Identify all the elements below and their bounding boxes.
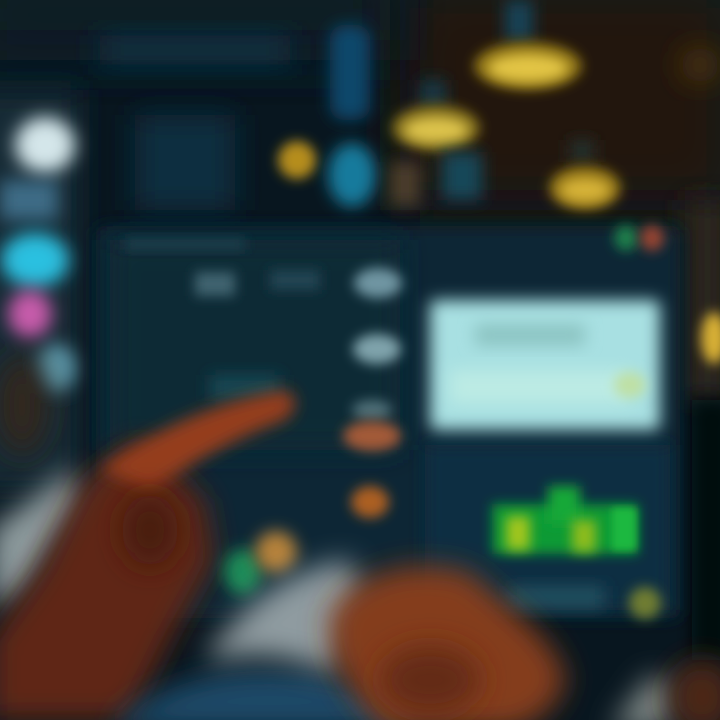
pale blue panel	[0, 180, 58, 220]
palm	[0, 440, 215, 720]
hanging lamps and warm lights	[278, 0, 720, 364]
white glow	[15, 117, 75, 173]
jeans	[115, 671, 415, 720]
small green and orange token	[224, 531, 297, 595]
light blue glow	[36, 344, 76, 392]
hand	[330, 566, 566, 720]
menu items	[343, 268, 402, 518]
right hand and cuff	[210, 560, 566, 720]
left side glowing icons	[0, 117, 76, 455]
bottom right sleeve and arm	[610, 659, 720, 720]
cuff	[210, 560, 365, 675]
lamp 3	[549, 140, 621, 210]
left hand with pointing finger	[0, 390, 295, 720]
panel: dashboard	[96, 225, 680, 619]
small amber light	[278, 141, 316, 179]
faint text rows	[125, 238, 320, 401]
sleeve	[0, 470, 85, 610]
green bar chart	[492, 486, 638, 554]
blue bottles	[328, 25, 482, 207]
light screen	[430, 300, 660, 430]
pink glow	[8, 290, 52, 338]
footer row	[508, 586, 661, 619]
finger	[100, 390, 295, 490]
cyan glow	[1, 233, 69, 287]
right edge light	[701, 312, 720, 364]
muted brown patch	[0, 355, 48, 455]
lamp 1	[474, 0, 582, 90]
status dots	[614, 225, 664, 251]
lamp 2	[392, 80, 480, 151]
shading	[122, 494, 178, 566]
